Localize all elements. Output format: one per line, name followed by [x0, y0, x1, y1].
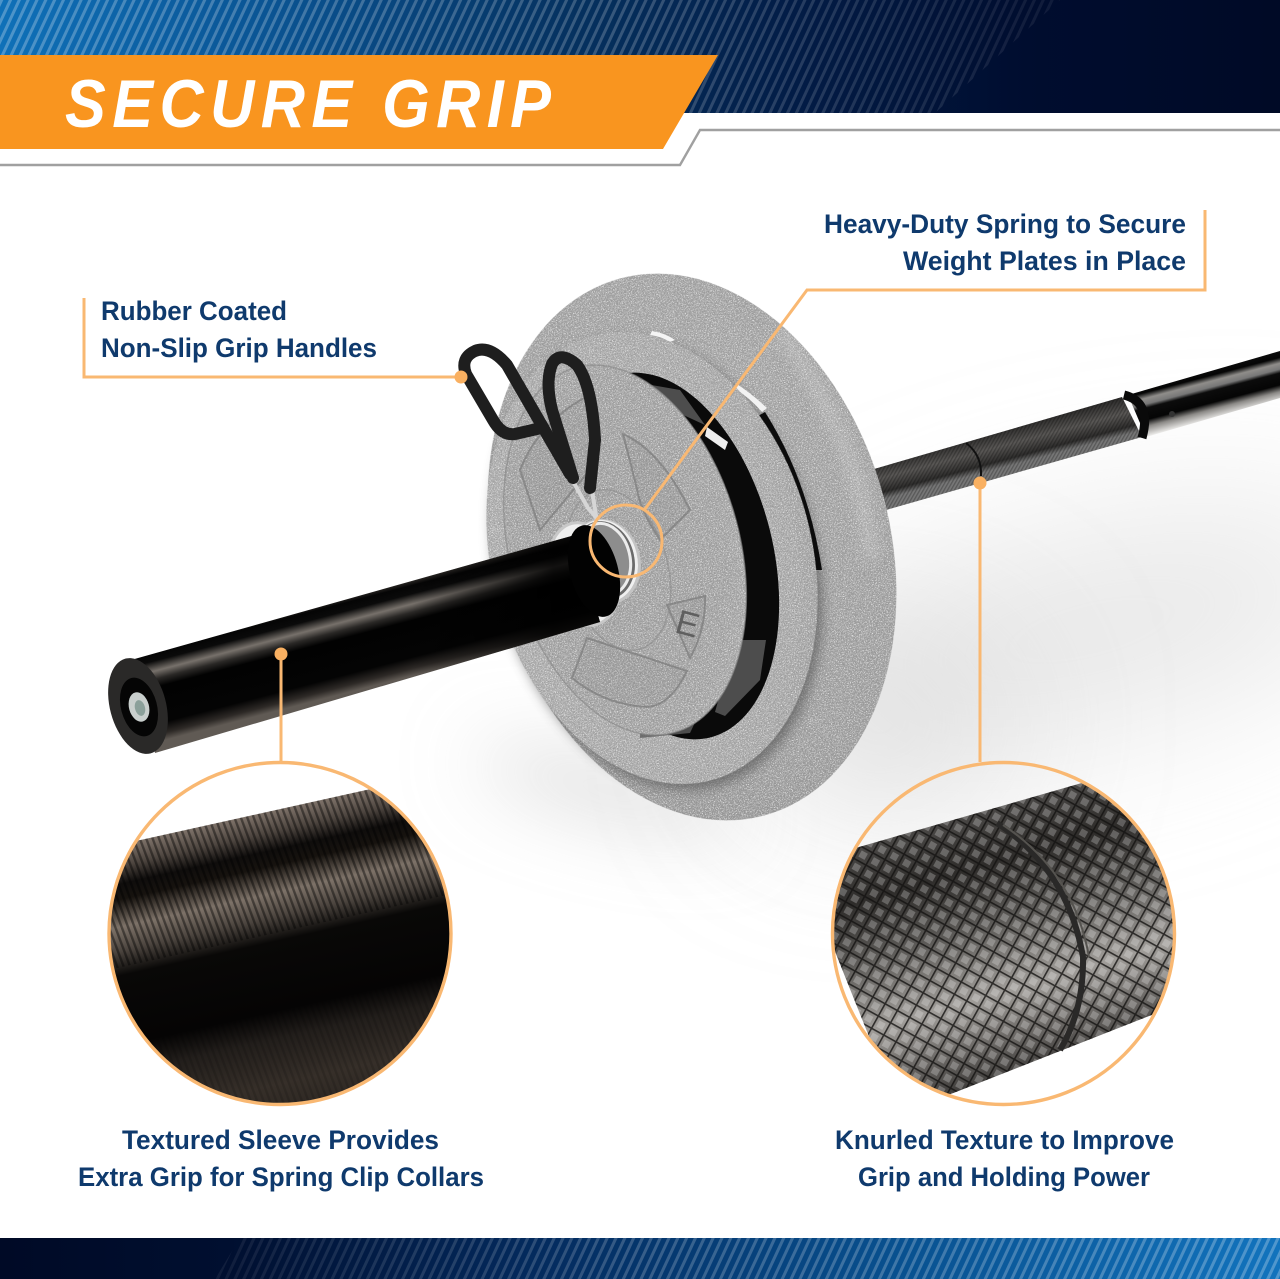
knurl seam [997, 823, 1083, 1050]
connector: knurled bar [974, 476, 986, 762]
hub arc [548, 478, 688, 662]
gap sliver top [650, 331, 675, 342]
hollow metal glints [600, 376, 766, 738]
connector: spring [590, 210, 1205, 577]
clip wires [570, 476, 600, 522]
weight plates [429, 227, 955, 867]
circle inset: knurled bar [830, 760, 1176, 1106]
front plate windows [520, 395, 705, 707]
caption: knurled texture [835, 1125, 1174, 1192]
header outline stroke [0, 130, 1280, 165]
middle plate hollow [515, 348, 815, 764]
orange title ribbon [0, 55, 718, 149]
caption: spring: Heavy-Duty Spring to Secure [824, 209, 1186, 239]
sleeve end cap [98, 651, 178, 761]
caption: grip handles [101, 296, 377, 363]
gap sliver right [734, 384, 767, 412]
back plate bright rim [780, 330, 872, 560]
left grip loop [464, 350, 570, 474]
caption: textured sleeve [78, 1125, 484, 1192]
end cap bolt [125, 690, 153, 724]
caption: grip handles: Non-Slip Grip Handles [101, 333, 377, 363]
barbell shaft: right side [850, 351, 1280, 516]
sleeve end round [559, 519, 629, 623]
gap behind middle plate [758, 412, 822, 570]
plate logo letter: E [672, 603, 703, 646]
caption: knurled texture: Grip and Holding Power [858, 1162, 1150, 1192]
back plate [429, 227, 955, 867]
front plate [465, 338, 785, 762]
knurled bar [850, 397, 1142, 516]
caption: grip handles: Rubber Coated [101, 296, 287, 326]
hollow white gap [705, 427, 728, 450]
title: SECURE GRIP [65, 65, 552, 142]
header banner [0, 0, 1280, 113]
circle inset: textured sleeve [107, 760, 453, 1106]
spring collar rings [538, 513, 648, 633]
connector: grip handles [84, 298, 468, 384]
caption: textured sleeve: Extra Grip for Spring Clip Collars [78, 1162, 484, 1192]
floor shadows [468, 460, 1280, 849]
caption: spring: Weight Plates in Place [903, 246, 1186, 276]
spring clip handles [464, 350, 600, 522]
middle plate [438, 294, 866, 822]
soft shadow of middle plate [443, 300, 871, 828]
knurl seam [966, 443, 981, 476]
footer banner [0, 1238, 1280, 1279]
front plate rim [465, 338, 785, 762]
end cap recess [114, 673, 164, 741]
connector: sleeve [274, 648, 288, 762]
caption: spring [824, 209, 1186, 276]
sleeve collar [1124, 395, 1145, 438]
shaft sleeve [1128, 351, 1280, 437]
right grip loop [548, 357, 595, 488]
caption: knurled texture: Knurled Texture to Improve [835, 1125, 1174, 1155]
black sleeve [98, 519, 629, 761]
caption: textured sleeve: Textured Sleeve Provides [122, 1125, 439, 1155]
